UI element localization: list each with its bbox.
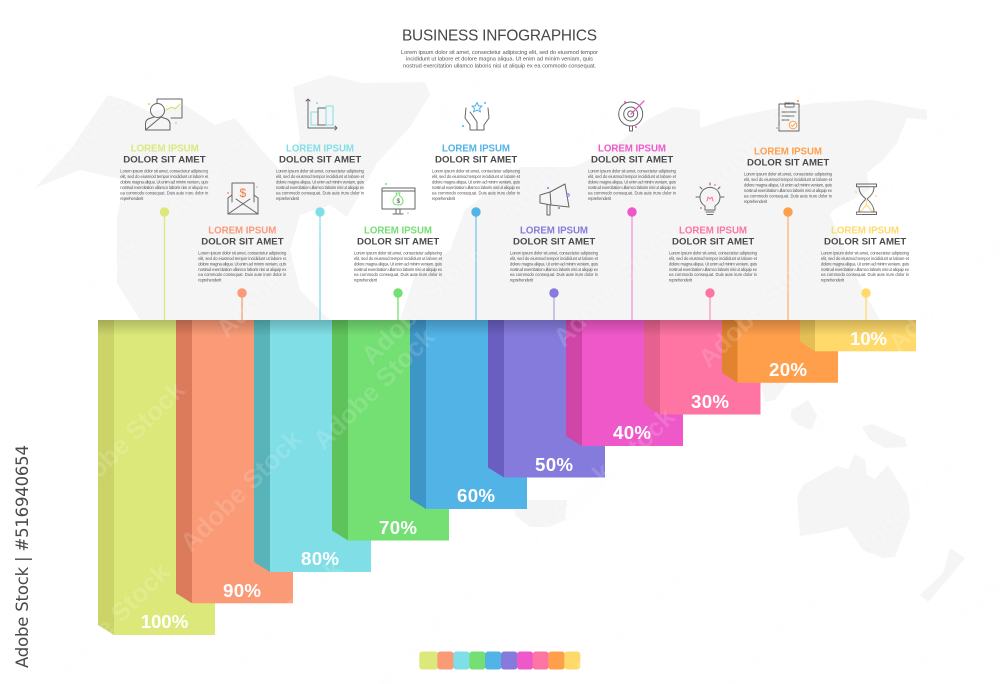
connector [549,288,559,320]
icon: megaphone [540,184,569,215]
bar 20%: 20% [769,359,807,380]
bar 60%: 60% [457,485,495,506]
body text: dolore magna aliqua. Ut enim ad minim veniam, quis [120,180,208,185]
body text: elit, sed do eiusmod tempor incididunt ut labore et [821,256,910,261]
body text: reprehenderit [588,196,612,201]
body text [510,250,599,283]
body text: dolore magna aliqua. Ut enim ad minim veniam, quis [354,261,442,266]
bar 80% [254,320,371,572]
bar 40% [566,320,683,446]
title: BUSINESS INFOGRAPHICS [402,28,597,44]
stock watermark pattern: Adobe Stock [837,443,971,577]
stock watermark pattern: Adobe Stock [210,209,344,343]
column 9 [744,100,833,320]
stock watermark pattern: Adobe Stock [567,552,701,684]
heading: LOREM IPSUM [131,144,199,155]
bar 80%: 80% [301,548,339,569]
heading: DOLOR SIT AMET [123,155,206,166]
heading [279,144,361,166]
icon: target with dart [619,101,644,131]
body text: reprehenderit [669,278,693,283]
body text: nostrud exercitation ullamco laboris nisi ut aliquip ex [276,185,365,190]
stock watermark pattern: Adobe Stock [355,236,489,370]
connector [471,207,481,320]
connector [861,288,871,320]
bar 10% [800,320,916,351]
bar 100%: 100% [141,611,189,632]
intro text: incididunt ut labore et dolore magna aliqua. Ut enim ad minim veniam, quis [406,56,593,62]
stock watermark pattern: Adobe Stock [495,93,629,227]
body text: ea commodo consequat. Duis aute irure dolor in [821,272,910,277]
stepped 3D bar chart [98,320,916,635]
body text: Lorem ipsum dolor sit amet, consectetur adipiscing [432,169,521,174]
stock watermark pattern: Adobe Stock [547,218,681,352]
body text: Lorem ipsum dolor sit amet, consectetur adipiscing [588,169,677,174]
icon: bar chart [306,99,337,130]
stock watermark pattern: Adobe Stock [707,399,841,533]
bar 50%: 50% [535,454,573,475]
heading: DOLOR SIT AMET [824,236,906,247]
heading: LOREM IPSUM [679,225,747,236]
body text [588,169,677,201]
body text: dolore magna aliqua. Ut enim ad minim veniam, quis [198,261,286,266]
heading [591,144,673,166]
body text: ea commodo consequat. Duis aute irure dolor in [588,190,677,196]
icon: envelope with dollar letter: $ [240,186,246,200]
bar 70% [332,320,449,540]
heading [435,144,517,166]
body text: dolore magna aliqua. Ut enim ad minim veniam, quis [276,180,364,185]
body text: nostrud exercitation ullamco laboris nisi ut aliquip ex [821,267,910,272]
background world map [35,75,965,602]
stock watermark pattern: Adobe Stock [842,94,976,228]
body text: nostrud exercitation ullamco laboris nisi ut aliquip ex [744,188,833,193]
body text: ea commodo consequat. Duis aute irure dolor in [669,272,758,277]
body text: Lorem ipsum dolor sit amet, consectetur adipiscing [669,250,758,255]
column 10 [821,184,910,320]
bar 90%: 90% [223,580,261,601]
heading [357,225,439,247]
body text: dolore magna aliqua. Ut enim ad minim veniam, quis [432,180,520,185]
body text: reprehenderit [821,278,845,283]
icon: hands with star [462,102,489,130]
bar 30% [644,320,760,414]
heading: DOLOR SIT AMET [591,155,673,166]
icon: light bulb [696,183,724,214]
body text [432,169,521,201]
heading: DOLOR SIT AMET [357,236,439,247]
connector [237,288,247,320]
body text: Lorem ipsum dolor sit amet, consectetur adipiscing [198,250,287,255]
heading [123,144,206,166]
body text: reprehenderit [198,278,222,283]
body text: dolore magna aliqua. Ut enim ad minim veniam, quis [588,180,676,185]
body text: elit, sed do eiusmod tempor incididunt ut labore et [120,174,209,179]
connector [783,207,793,320]
heading: DOLOR SIT AMET [201,236,284,247]
body text: Lorem ipsum dolor sit amet, consectetur adipiscing [744,172,833,177]
heading: DOLOR SIT AMET [513,236,595,247]
connector [705,288,715,320]
connector [315,207,325,320]
heading: LOREM IPSUM [442,144,510,155]
heading: LOREM IPSUM [520,225,588,236]
body text [669,250,758,283]
body text: nostrud exercitation ullamco laboris nisi ut aliquip ex [588,185,677,190]
heading: DOLOR SIT AMET [747,158,829,169]
body text: elit, sed do eiusmod tempor incididunt ut labore et [276,174,365,179]
stock watermark pattern: Adobe Stock [547,401,681,535]
heading: LOREM IPSUM [754,147,822,158]
stock watermark pattern: Adobe Stock [307,321,441,455]
bar 40%: 40% [613,422,651,443]
body text: ea commodo consequat. Duis aute irure dolor in [354,272,443,277]
heading: LOREM IPSUM [598,144,666,155]
column 6 [510,184,599,320]
colour legend strip [419,652,580,670]
body text: Lorem ipsum dolor sit amet, consectetur adipiscing [120,169,209,174]
body text: elit, sed do eiusmod tempor incididunt ut labore et [669,256,758,261]
body text: nostrud exercitation ullamco laboris nisi ut aliquip ex [120,185,209,190]
body text [354,250,443,283]
body text: nostrud exercitation ullamco laboris nisi ut aliquip ex [510,267,599,272]
stock watermark pattern: Adobe Stock [484,456,618,590]
bar 50% [488,320,605,478]
column 4 [354,183,443,320]
stock watermark pattern: Adobe Stock [37,49,171,183]
icon: hourglass [855,184,877,214]
heading: DOLOR SIT AMET [435,155,517,166]
body text: dolore magna aliqua. Ut enim ad minim veniam, quis [744,183,832,188]
stock watermark pattern: Adobe Stock [174,423,308,557]
stock watermark pattern: Adobe Stock [364,59,498,193]
body text: elit, sed do eiusmod tempor incididunt ut labore et [510,256,599,261]
body text: elit, sed do eiusmod tempor incididunt ut labore et [588,174,677,179]
heading: LOREM IPSUM [831,225,899,236]
body text: nostrud exercitation ullamco laboris nisi ut aliquip ex [669,267,758,272]
intro text: Lorem ipsum dolor sit amet, consectetur adipiscing elit, sed do eiusmod tempor [401,50,598,56]
heading [824,225,906,247]
stock watermark pattern: Adobe Stock [57,374,191,508]
body text: nostrud exercitation ullamco laboris nisi ut aliquip ex [354,267,443,272]
body text: reprehenderit [744,199,768,204]
body text: reprehenderit [432,196,456,201]
connector [160,207,169,320]
body text: Lorem ipsum dolor sit amet, consectetur adipiscing [354,250,443,255]
heading: DOLOR SIT AMET [672,236,754,247]
body text: nostrud exercitation ullamco laboris nisi ut aliquip ex [198,267,287,272]
body text: reprehenderit [120,196,144,201]
heading [672,225,754,247]
stock watermark pattern: Adobe Stock [14,229,148,363]
body text: elit, sed do eiusmod tempor incididunt ut labore et [744,177,833,182]
intro text [401,50,598,69]
body text [198,250,287,283]
heading [201,225,284,247]
stock watermark pattern: Adobe Stock [692,239,826,373]
intro text: nostrud exercitation ullamco laboris nisi ut aliquip ex ea commodo consequat. [403,63,596,69]
column 1 [120,99,209,320]
bar 90% [176,320,293,603]
body text [821,250,910,283]
connector [393,288,403,320]
body text [744,172,833,204]
body text: ea commodo consequat. Duis aute irure dolor in [198,272,287,277]
vertical stock id text: Adobe Stock | #516940654 [13,445,32,668]
body text: ea commodo consequat. Duis aute irure dolor in [510,272,599,277]
icon: monitor with money bag: $ [396,198,400,205]
body text: dolore magna aliqua. Ut enim ad minim veniam, quis [669,261,757,266]
body text: Lorem ipsum dolor sit amet, consectetur adipiscing [276,169,365,174]
body text: reprehenderit [276,196,300,201]
stock watermark pattern: Adobe Stock [215,553,349,684]
body text: ea commodo consequat. Duis aute irure dolor in [744,194,833,198]
body text [276,169,365,201]
body text: elit, sed do eiusmod tempor incididunt ut labore et [432,174,521,179]
body text: dolore magna aliqua. Ut enim ad minim veniam, quis [510,261,598,266]
column 2 [198,183,287,320]
body text: ea commodo consequat. Duis aute irure dolor in [276,190,365,196]
bar 60% [410,320,527,509]
body text: dolore magna aliqua. Ut enim ad minim veniam, quis [821,261,909,266]
column 5 [432,102,521,320]
body text: reprehenderit [510,278,534,283]
body text: elit, sed do eiusmod tempor incididunt ut labore et [198,256,287,261]
body text: elit, sed do eiusmod tempor incididunt ut labore et [354,256,443,261]
heading: LOREM IPSUM [286,144,354,155]
stock watermark pattern: Adobe Stock [699,64,833,198]
heading [747,147,829,169]
heading: LOREM IPSUM [208,225,276,236]
body text: Lorem ipsum dolor sit amet, consectetur adipiscing [510,250,599,255]
heading: LOREM IPSUM [364,225,432,236]
connector [627,207,637,320]
bar 100% [98,320,215,635]
column 7 [588,101,677,320]
body text: ea commodo consequat. Duis aute irure dolor in [432,190,521,196]
bar 30%: 30% [691,391,729,412]
stock watermark pattern: Adobe Stock [160,89,294,223]
body text: nostrud exercitation ullamco laboris nisi ut aliquip ex [432,185,521,190]
body text: Lorem ipsum dolor sit amet, consectetur adipiscing [821,250,910,255]
bar 20% [722,320,838,383]
body text [120,169,209,201]
body text: reprehenderit [354,278,378,283]
body text: ea commodo consequat. Duis aute irure dolor in [120,190,209,196]
bar 70%: 70% [379,517,417,538]
heading: DOLOR SIT AMET [279,155,361,166]
icon: clipboard with check [776,100,799,131]
column 8 [669,183,758,320]
bar 10%: 10% [850,328,887,349]
heading [513,225,595,247]
column 3 [276,99,365,320]
icon: person with chart bubble [146,99,182,130]
